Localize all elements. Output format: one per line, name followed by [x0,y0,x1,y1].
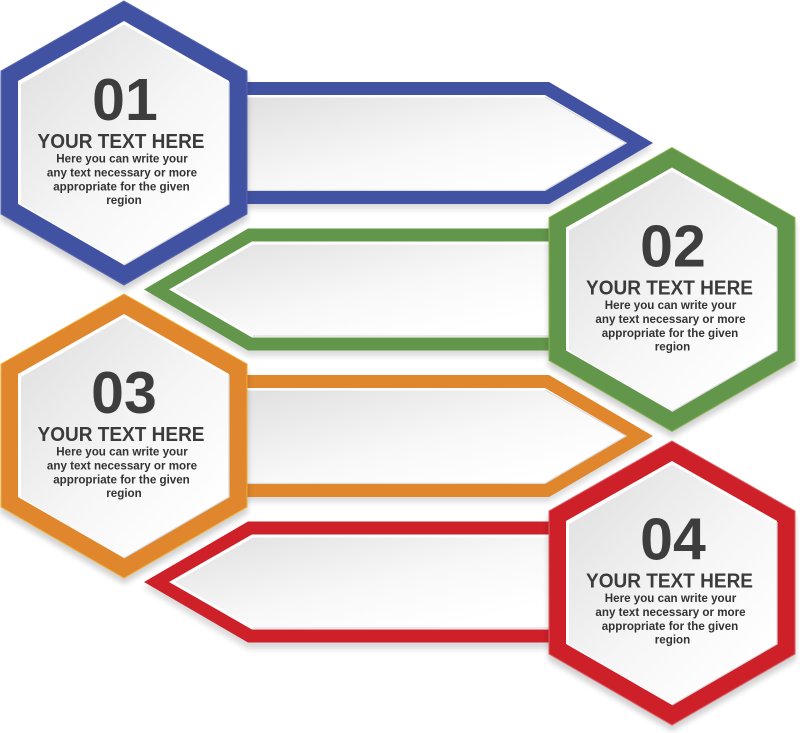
hexagon 1 frame [1,1,247,285]
body text 1: region [106,194,142,207]
hexagon 2 frame [549,148,795,432]
hexagon 1: blue [0,1,248,291]
body text 2: any text necessary or more [595,313,746,326]
arrow panel 2: green [144,228,560,356]
arrow panel 1: blue [240,82,653,209]
body text 2: Here you can write your [605,299,737,312]
body text 3: any text necessary or more [47,460,198,472]
hexagon 3 inner panel [18,314,229,558]
hexagon 3: orange [0,294,248,584]
body text 1: Here you can write your [56,152,188,166]
arrow panel 4: red [144,522,560,649]
hexagon 2: green [548,148,796,438]
hexagon 4 frame [549,441,795,725]
body text 4: region [655,634,690,646]
body text 2: appropriate for the given [602,327,738,340]
number 02: 02 [640,214,706,280]
body text 1 [47,152,198,207]
number 03: 03 [91,360,157,426]
heading 1: YOUR TEXT HERE [38,130,204,153]
body text 4: appropriate for the given [602,620,738,633]
heading 4: YOUR TEXT HERE [586,570,753,592]
body text 3: Here you can write your [56,446,188,458]
arrow panel 3: orange [240,375,653,502]
number 01: 01 [92,67,158,133]
body text 2 [595,299,746,354]
body text 2: region [655,340,690,354]
body text 4: any text necessary or more [595,606,746,619]
hexagon 4 inner panel [566,461,777,705]
hexagon 3 frame [1,294,247,578]
heading 3: YOUR TEXT HERE [38,423,204,446]
body text 1: appropriate for the given [53,180,190,194]
body text 4 [595,592,746,646]
body text 1: any text necessary or more [47,166,198,180]
body text 4: Here you can write your [605,592,737,605]
heading 2: YOUR TEXT HERE [586,276,753,300]
hexagon 1 inner panel [18,21,229,265]
number 04: 04 [640,506,706,572]
body text 3 [47,446,198,500]
body text 3: appropriate for the given [53,474,190,486]
hexagon 2 inner panel [566,168,777,412]
hexagon 4: red [548,441,796,731]
body text 3: region [106,487,142,500]
